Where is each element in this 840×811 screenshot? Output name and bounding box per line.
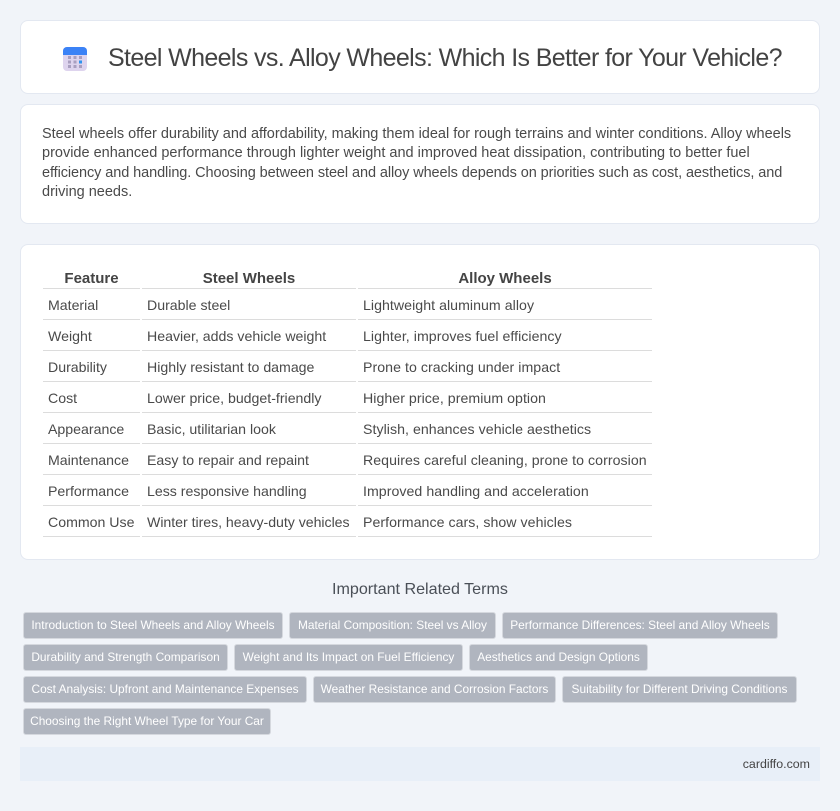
table card [20,244,820,560]
related terms tags: Material Composition: Steel vs Alloy [298,618,487,632]
summary card [20,104,820,224]
footer bar [20,747,820,781]
comparison table: Cost [48,390,77,406]
comparison table: Requires careful cleaning, prone to corrosion [363,452,647,468]
summary text [42,126,791,200]
related terms tags [23,612,797,735]
comparison table: Lighter, improves fuel efficiency [363,328,562,344]
comparison table: Less responsive handling [147,483,307,499]
related terms tags: Choosing the Right Wheel Type for Your Car [30,714,264,728]
comparison table: Lightweight aluminum alloy [363,297,534,313]
related terms tags: Weight and Its Impact on Fuel Efficiency [243,650,454,664]
related terms tags: Performance Differences: Steel and Alloy Wheels [510,618,770,632]
comparison table: Maintenance [48,452,129,468]
related terms tags: Weather Resistance and Corrosion Factors [321,682,548,696]
comparison table [43,270,652,537]
summary text: efficiency and handling. Choosing between steel and alloy wheels depends on priorities such as cost, aesthetics, and [42,165,782,181]
comparison table: Prone to cracking under impact [363,359,560,375]
comparison table: Material [48,297,98,313]
comparison table: Lower price, budget-friendly [147,390,322,406]
comparison table: Improved handling and acceleration [363,483,589,499]
related terms tags: Introduction to Steel Wheels and Alloy Wheels [31,618,275,632]
comparison table: Higher price, premium option [363,390,546,406]
comparison table: Common Use [48,514,134,530]
icon: calendar [63,47,87,71]
summary text: driving needs. [42,184,132,200]
header card [20,20,820,94]
comparison table: Weight [48,328,92,344]
comparison table: Stylish, enhances vehicle aesthetics [363,421,591,437]
comparison table: Basic, utilitarian look [147,421,276,437]
comparison table: Appearance [48,421,124,437]
related terms tags: Cost Analysis: Upfront and Maintenance Expenses [31,682,299,696]
comparison table: Performance cars, show vehicles [363,514,572,530]
comparison table: Winter tires, heavy-duty vehicles [147,514,350,530]
comparison table: Performance [48,483,129,499]
comparison table: Heavier, adds vehicle weight [147,328,326,344]
comparison table: Feature [64,270,119,287]
comparison table: Steel Wheels [203,270,295,287]
related terms tags: Aesthetics and Design Options [477,650,640,664]
comparison table: Durability [48,359,107,375]
comparison table: Alloy Wheels [458,270,552,287]
summary text: provide enhanced performance through lighter weight and improved heat dissipation, contributing to better fuel [42,145,750,161]
related terms heading: Important Related Terms [332,580,508,598]
comparison table: Highly resistant to damage [147,359,314,375]
related terms tags: Durability and Strength Comparison [31,650,220,664]
footer site name: cardiffo.com [743,757,810,771]
summary text: Steel wheels offer durability and affordability, making them ideal for rough terrains and winter conditions. Alloy wheels [42,126,791,142]
title: Steel Wheels vs. Alloy Wheels: Which Is Better for Your Vehicle? [108,44,782,72]
related terms tags: Suitability for Different Driving Conditions [572,682,787,696]
comparison table: Easy to repair and repaint [147,452,309,468]
comparison table: Durable steel [147,297,230,313]
